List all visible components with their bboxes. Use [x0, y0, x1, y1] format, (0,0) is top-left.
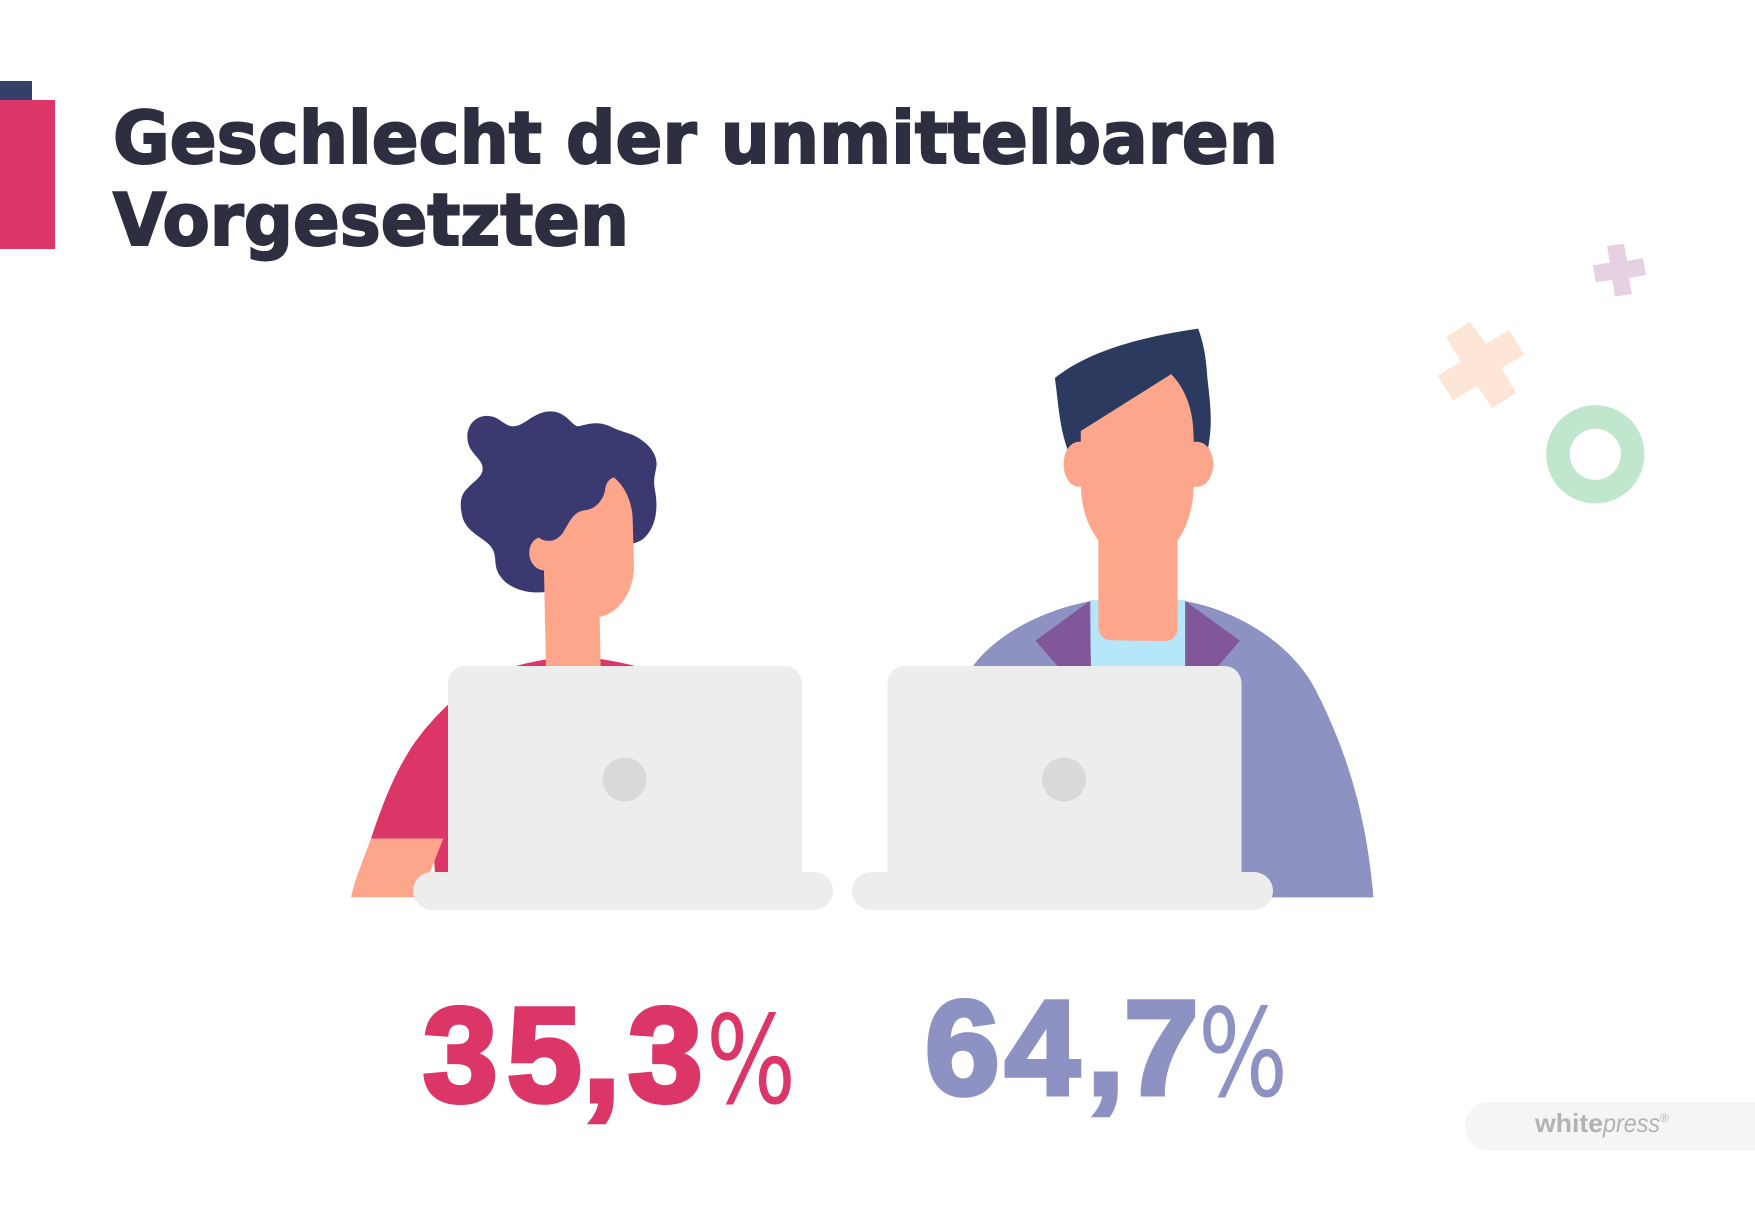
laptop: left: [413, 666, 833, 910]
whitepress logo: white: [1534, 1108, 1603, 1138]
statistic: 64,7%: 64,7: [925, 974, 1199, 1123]
statistic: 35,3%: 35,3: [423, 981, 703, 1130]
whitepress logo: [1465, 1102, 1755, 1151]
pink top: [371, 658, 640, 874]
title: [113, 96, 1278, 262]
face and neck: [1064, 374, 1213, 641]
lapels: [1036, 601, 1240, 667]
illustration: man at laptop: [972, 329, 1373, 897]
laptop: right: [852, 666, 1273, 910]
hair: [1055, 329, 1211, 450]
statistic: 64,7%: %: [1198, 983, 1288, 1125]
arm: [351, 838, 443, 897]
face and neck: [529, 477, 634, 667]
icon: decorative shapes: [1438, 244, 1646, 492]
whitepress logo: ®: [1660, 1111, 1669, 1125]
title: Geschlecht der unmittelbaren: [113, 96, 1278, 180]
jacket: [972, 601, 1373, 897]
title: Vorgesetzten: [113, 178, 629, 262]
hair: [461, 411, 657, 594]
shirt: [1091, 600, 1185, 667]
illustration: woman at laptop: [351, 411, 657, 897]
accent bar: [0, 81, 55, 249]
whitepress logo: press: [1602, 1108, 1660, 1138]
statistic: 35,3%: %: [706, 990, 796, 1132]
